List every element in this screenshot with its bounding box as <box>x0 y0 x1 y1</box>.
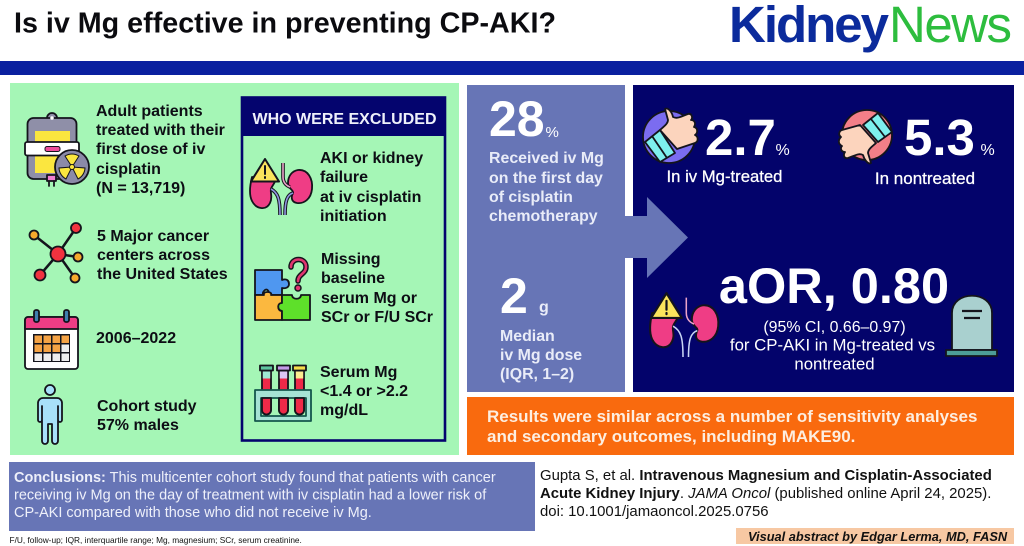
text: AKI exclusion: failure <box>320 169 368 186</box>
results text: and secondary outcomes, including MAKE90. <box>487 427 855 446</box>
text: confidence interval: for CP-AKI in Mg-treated vs <box>730 336 935 354</box>
citation: doi: 10.1001/jamaoncol.2025.0756 <box>540 504 769 520</box>
icon: kidneys with warning <box>250 159 312 215</box>
text: AKI exclusion: at iv cisplatin <box>320 189 421 206</box>
logo: Kidney News <box>729 0 1011 53</box>
text: received iv Mg: of cisplatin <box>489 189 573 206</box>
excluded heading <box>241 97 446 136</box>
excluded box <box>242 98 445 440</box>
conclusions text: CP-AKI compared with those who did not receive iv Mg. <box>14 505 372 521</box>
text: received iv Mg: chemotherapy <box>489 208 598 225</box>
text: median dose: (IQR, 1–2) <box>500 366 574 383</box>
stat: 2 g: 2 <box>500 268 528 324</box>
text: AKI exclusion: AKI or kidney <box>320 150 423 167</box>
header bar <box>0 61 1024 75</box>
stat: adjusted odds ratio: aOR, 0.80 <box>719 257 949 314</box>
results background <box>467 397 1014 455</box>
stat: 5.3 percent: % <box>980 142 995 159</box>
text: missing baseline: SCr or F/U SCr <box>321 309 433 326</box>
stat: 5.3 percent: 5.3 <box>904 109 975 166</box>
arrow <box>625 197 688 278</box>
text: confidence interval: (95% CI, 0.66–0.97) <box>763 319 906 336</box>
excluded heading: WHO WERE EXCLUDED <box>252 111 436 128</box>
panel: study population <box>10 83 459 455</box>
icon: calendar <box>25 310 78 369</box>
panel: secondary results <box>467 397 1014 455</box>
text: in iv Mg-treated: In iv Mg-treated <box>667 167 782 186</box>
text: median dose: Median <box>500 328 555 345</box>
icon: kidneys with warning <box>650 293 718 357</box>
conclusions text: Conclusions: This multicenter cohort study found that patients with cancer <box>14 470 496 486</box>
icon: puzzle with question mark <box>255 260 310 320</box>
text: patients: treated with their <box>96 122 225 139</box>
text: received iv Mg: Received iv Mg <box>489 150 604 167</box>
conclusions background <box>9 462 535 531</box>
stat: 2.7 percent: 2.7 <box>705 109 776 166</box>
text: patients: cisplatin <box>96 161 161 178</box>
citation: Gupta S, et al. Intravenous Magnesium and Cisplatin-Associated <box>540 468 992 484</box>
text: received iv Mg: on the first day <box>489 170 603 187</box>
text: missing baseline: Missing <box>321 251 381 268</box>
stat: 2 g <box>500 268 549 324</box>
icon: network <box>30 223 82 282</box>
stat: 2.7 percent: % <box>776 142 790 159</box>
icon: tombstone <box>946 296 997 356</box>
icon: person <box>38 385 62 444</box>
icon: thumbs up <box>643 109 698 163</box>
text: cancer centers: centers across <box>97 247 210 264</box>
footnote: F/U, follow-up; IQR, interquartile range; Mg, magnesium; SCr, serum creatinine. <box>10 535 302 545</box>
text: patients: first dose of iv <box>96 141 205 158</box>
citation: Acute Kidney Injury. JAMA Oncol (published online April 24, 2025). <box>540 486 991 502</box>
icon: thumbs down <box>839 110 892 163</box>
text: missing baseline: serum Mg or <box>321 290 417 307</box>
panel: conclusions <box>9 462 535 531</box>
text: years: 2006–2022 <box>96 330 176 347</box>
title: Is iv Mg effective in preventing CP-AKI? <box>14 8 556 40</box>
text: in nontreated: In nontreated <box>875 169 975 188</box>
stat: 28 percent: 28 <box>489 91 545 147</box>
icon: blood test tubes <box>255 366 311 421</box>
results text: Results were similar across a number of sensitivity analyses <box>487 407 977 426</box>
text: cancer centers: the United States <box>97 266 228 283</box>
panel: outcomes <box>633 85 1014 392</box>
text: confidence interval: nontreated <box>794 354 875 374</box>
panel background <box>10 83 459 455</box>
credit: Visual abstract by Edgar Lerma, MD, FASN <box>748 529 1008 544</box>
text: missing baseline: baseline <box>321 270 385 287</box>
text: patients: (N = 13,719) <box>96 180 185 197</box>
stat: 28 percent: % <box>546 124 559 141</box>
exposure background <box>467 85 625 392</box>
conclusions text: receiving iv Mg on the day of treatment with iv cisplatin had a lower risk of <box>14 488 487 504</box>
outcomes background <box>633 85 1014 392</box>
text: median dose: iv Mg dose <box>500 347 582 364</box>
panel: iv Mg exposure <box>467 85 625 392</box>
text: cancer centers: 5 Major cancer <box>97 228 209 245</box>
text: cohort: 57% males <box>97 417 179 434</box>
stat: 2 g: g <box>539 299 549 316</box>
text: AKI exclusion: initiation <box>320 208 387 225</box>
text: serum Mg range: Serum Mg <box>320 364 397 381</box>
icon: chemotherapy bag <box>25 113 89 186</box>
panel: who were excluded <box>241 97 446 440</box>
text: serum Mg range: <1.4 or >2.2 <box>320 383 408 400</box>
text: patients: Adult patients <box>96 103 203 120</box>
text: cohort: Cohort study <box>97 398 197 415</box>
text: serum Mg range: mg/dL <box>320 402 368 419</box>
